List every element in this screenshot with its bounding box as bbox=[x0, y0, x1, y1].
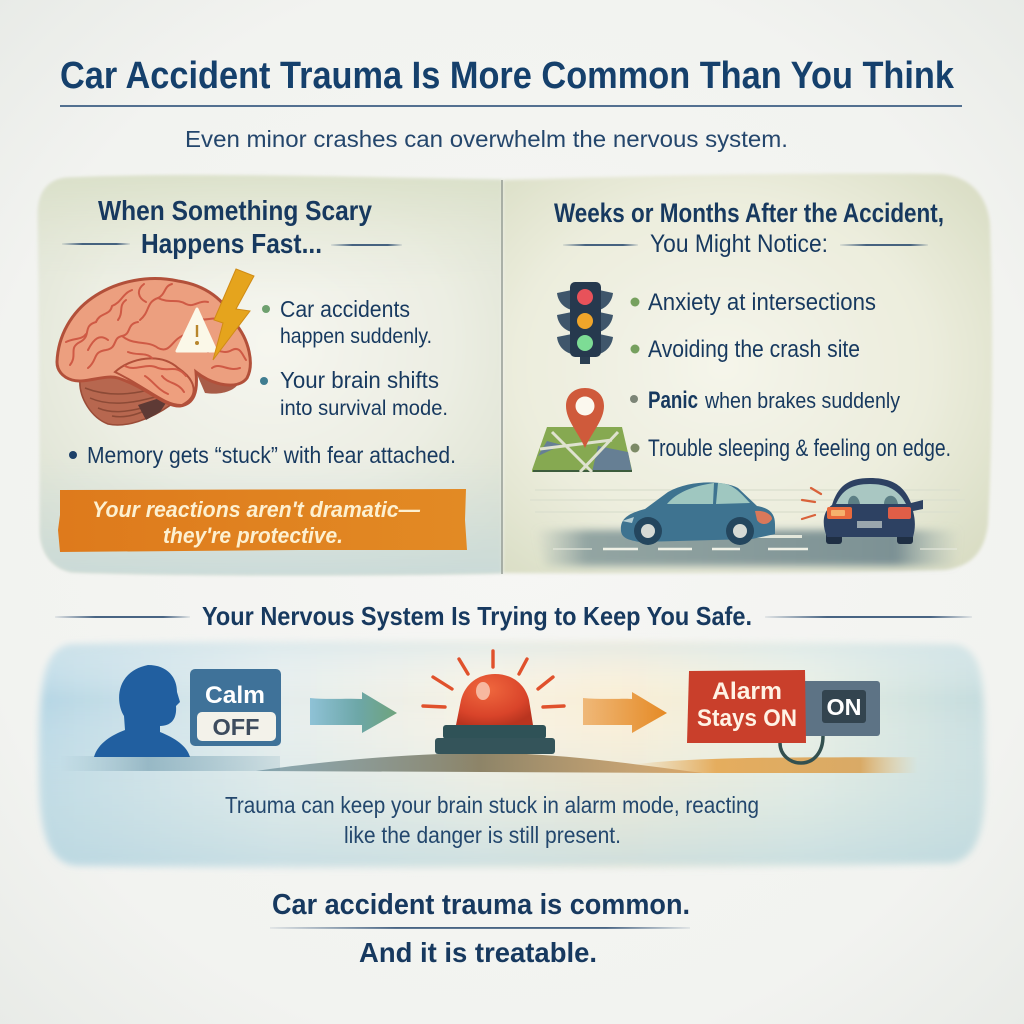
title: Car Accident Trauma Is More Common Than You Think bbox=[60, 55, 955, 97]
icon: brake impact lines bbox=[802, 488, 821, 519]
callout banner: they're protective. bbox=[163, 523, 343, 548]
bullet list: brain response: Car accidents bbox=[280, 296, 410, 322]
heading: when something scary: When Something Scary bbox=[98, 195, 372, 226]
bullet list: brain response: happen suddenly. bbox=[280, 325, 432, 348]
callout banner: Your reactions aren't dramatic— bbox=[92, 497, 421, 522]
bullet list: symptoms bbox=[630, 289, 951, 462]
explanation text: Trauma can keep your brain stuck in alarm mode, reacting bbox=[225, 792, 759, 818]
panel: weeks or months after bbox=[502, 173, 992, 574]
heading: weeks or months bbox=[554, 198, 944, 258]
bullet list: symptoms: Anxiety at intersections bbox=[648, 289, 876, 316]
alarm stays on switch: ON bbox=[826, 694, 862, 720]
calm off switch: OFF bbox=[212, 714, 260, 740]
icon: brain with warning and lightning bbox=[57, 269, 254, 425]
icon: map with pin bbox=[532, 388, 632, 472]
bullet list: brain response: into survival mode. bbox=[280, 397, 448, 420]
explanation text bbox=[225, 792, 759, 848]
closing message: And it is treatable. bbox=[359, 937, 597, 968]
alarm stays on switch: Stays ON bbox=[697, 705, 797, 732]
heading: when something scary bbox=[62, 195, 402, 259]
arrow: alarm to stays on bbox=[583, 692, 667, 733]
closing message: Car accident trauma is common. bbox=[272, 889, 690, 921]
panel divider bbox=[501, 180, 503, 574]
heading: weeks or months: Weeks or Months After the Accident, bbox=[554, 198, 944, 228]
icon: lightning bolt bbox=[213, 269, 254, 360]
icon: blue car bbox=[621, 482, 775, 545]
explanation text: like the danger is still present. bbox=[344, 822, 621, 848]
panel: nervous system alarm bbox=[40, 642, 984, 867]
calm off switch: Calm bbox=[205, 682, 265, 709]
icon: cable bbox=[780, 736, 823, 763]
bullet list: symptoms: Trouble sleeping & feeling on edge. bbox=[648, 435, 951, 462]
alarm stays on switch: Alarm bbox=[712, 678, 782, 705]
bullet list: brain response: Memory gets “stuck” with fear attached. bbox=[87, 442, 456, 468]
section heading: nervous system: Your Nervous System Is Trying to Keep You Safe. bbox=[202, 601, 752, 631]
heading: weeks or months: You Might Notice: bbox=[650, 230, 828, 258]
ground hills bbox=[60, 753, 918, 773]
bullet list: symptoms: Avoiding the crash site bbox=[648, 336, 860, 363]
calm off switch bbox=[190, 669, 281, 746]
bullet list: symptoms: Panic bbox=[648, 387, 698, 414]
illustration: road with two cars bbox=[530, 478, 965, 566]
bullet list: brain response: Your brain shifts bbox=[280, 367, 439, 393]
bullet list: brain response bbox=[69, 296, 456, 468]
icon: warning triangle bbox=[177, 309, 216, 351]
subtitle: Even minor crashes can overwhelm the nervous system. bbox=[185, 126, 788, 152]
arrow: calm to alarm bbox=[310, 692, 397, 733]
icon: dark car rear bbox=[824, 478, 923, 544]
icon: red siren bbox=[423, 651, 564, 754]
closing message bbox=[270, 889, 690, 968]
heading: when something scary: Happens Fast... bbox=[141, 228, 322, 259]
icon: person silhouette bbox=[94, 665, 190, 757]
alarm stays on switch bbox=[687, 670, 880, 763]
panel: when something scary happens fast bbox=[38, 175, 502, 575]
bullet list: symptoms: when brakes suddenly bbox=[704, 388, 900, 413]
icon: traffic light bbox=[557, 282, 613, 364]
callout banner bbox=[58, 489, 467, 552]
